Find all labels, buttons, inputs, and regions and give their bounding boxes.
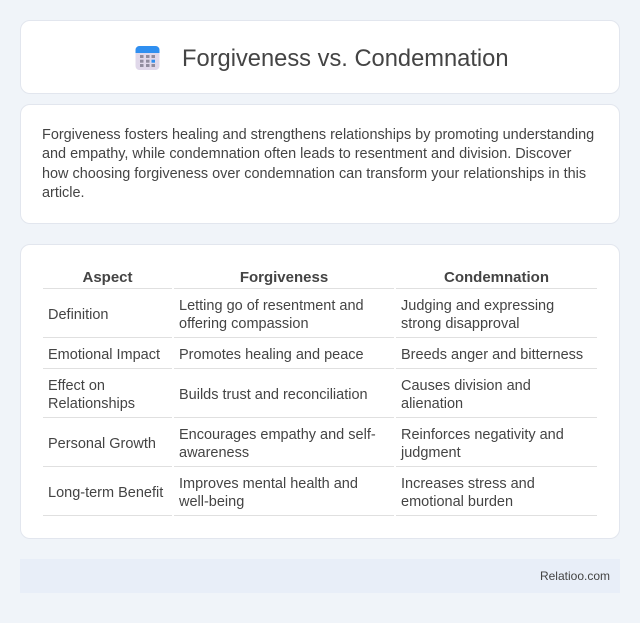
panel: introduction xyxy=(20,104,620,224)
panel: comparison table xyxy=(20,244,620,539)
cell: Encourages empathy and self- xyxy=(179,427,376,443)
header: Aspect: Aspect xyxy=(82,269,133,286)
cell xyxy=(401,298,554,332)
header: Forgiveness: Forgiveness xyxy=(240,269,328,286)
cell xyxy=(179,427,376,461)
cell: emotional burden xyxy=(401,494,513,510)
row: Long-term Benefit: Long-term Benefit xyxy=(48,485,163,501)
panel: title card xyxy=(20,20,620,94)
cell: Causes division and xyxy=(401,378,531,394)
cell: judgment xyxy=(401,445,461,461)
cell xyxy=(401,378,531,412)
row: Emotional Impact: Emotional Impact xyxy=(48,347,160,363)
title: Forgiveness vs. Condemnation xyxy=(182,46,509,72)
cell: Builds trust and reconciliation xyxy=(179,387,368,403)
cell: strong disapproval xyxy=(401,316,520,332)
cell: alienation xyxy=(401,396,463,412)
intro text: Forgiveness fosters healing and strengthens relationships by promoting understanding xyxy=(42,127,594,143)
intro text: and empathy, while condemnation often leads to resentment and division. Discover xyxy=(42,146,571,162)
row: Personal Growth: Personal Growth xyxy=(48,436,156,452)
cell: offering compassion xyxy=(179,316,309,332)
cell: Breeds anger and bitterness xyxy=(401,347,583,363)
cell xyxy=(401,476,535,510)
cell: well-being xyxy=(179,494,244,510)
cell xyxy=(179,476,358,510)
intro text xyxy=(42,127,594,201)
cell xyxy=(400,427,564,461)
intro text: how choosing forgiveness over condemnation can transform your relationships in this xyxy=(42,166,586,182)
cell: Increases stress and xyxy=(401,476,535,492)
row: Effect on Relationships xyxy=(48,378,135,412)
intro text: article. xyxy=(42,185,85,201)
icon: calendar xyxy=(136,46,160,70)
cell: Judging and expressing xyxy=(401,298,554,314)
cell: Improves mental health and xyxy=(179,476,358,492)
row: Definition: Definition xyxy=(48,307,108,323)
cell: awareness xyxy=(179,445,249,461)
cell xyxy=(179,298,364,332)
cell: Letting go of resentment and xyxy=(179,298,364,314)
row: Effect on Relationships: Relationships xyxy=(48,396,135,412)
row: Effect on Relationships: Effect on xyxy=(48,378,105,394)
cell: Promotes healing and peace xyxy=(179,347,364,363)
cell: Reinforces negativity and xyxy=(401,427,564,443)
footer text: Relatioo.com xyxy=(540,569,610,583)
footer bar xyxy=(20,559,620,593)
header: Condemnation: Condemnation xyxy=(444,269,549,286)
